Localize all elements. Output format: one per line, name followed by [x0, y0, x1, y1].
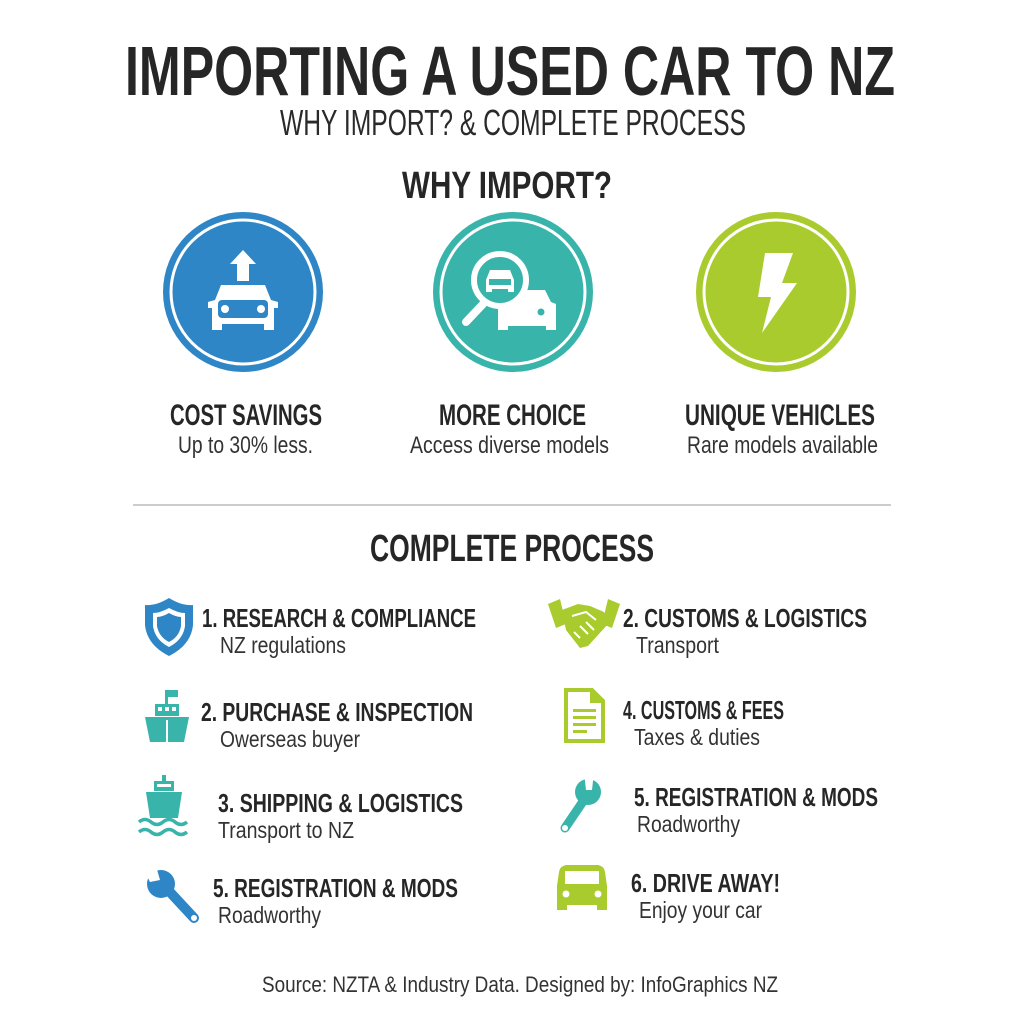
text: cost savings — [170, 399, 322, 459]
text: more choice: MORE CHOICE — [439, 399, 586, 432]
subtitle: WHY IMPORT? & COMPLETE PROCESS — [280, 102, 746, 143]
step 6 right: Enjoy your car — [639, 897, 762, 923]
step 1: NZ regulations — [220, 632, 346, 658]
step 6 right: 6. DRIVE AWAY! — [631, 868, 780, 898]
step 2 right: Transport — [636, 632, 720, 658]
step 2 left: 2. PURCHASE & INSPECTION — [201, 697, 473, 727]
icon: wrench teal — [562, 772, 601, 831]
icon: document — [566, 690, 603, 741]
icon: car lime — [557, 865, 607, 910]
step 2 left — [201, 697, 473, 752]
step 4 right: 4. CUSTOMS & FEES — [623, 695, 784, 725]
step 1 — [202, 603, 476, 658]
step 5 left: Roadworthy — [218, 902, 321, 928]
text: unique vehicles: UNIQUE VEHICLES — [685, 399, 875, 432]
icon: ship with waves — [139, 775, 187, 834]
footer source: Source: NZTA & Industry Data. Designed by: InfoGraphics NZ — [262, 972, 778, 997]
step 5 left — [213, 873, 458, 928]
step 2 right — [623, 603, 867, 658]
step 3 left — [218, 788, 463, 843]
text: more choice — [410, 399, 609, 459]
step 3 left: 3. SHIPPING & LOGISTICS — [218, 788, 463, 818]
step 2 left: Owerseas buyer — [220, 726, 360, 752]
step 1: 1. RESEARCH & COMPLIANCE — [202, 603, 476, 633]
icon: handshake — [548, 599, 620, 648]
icon: wrench blue — [142, 866, 197, 921]
text: unique vehicles — [685, 399, 878, 459]
step 3 left: Transport to NZ — [218, 817, 354, 843]
icon: ship — [145, 690, 189, 742]
heading: why import: WHY IMPORT? — [402, 165, 612, 207]
icon: shield — [145, 598, 193, 656]
icon: unique vehicles circle — [696, 212, 856, 372]
text: cost savings: COST SAVINGS — [170, 399, 322, 432]
text: cost savings: Up to 30% less. — [178, 432, 313, 459]
icon: cost savings circle — [163, 212, 323, 372]
step 6 right — [631, 868, 780, 923]
heading: complete process: COMPLETE PROCESS — [370, 528, 654, 570]
text: more choice: Access diverse models — [410, 432, 609, 459]
step 5 right: 5. REGISTRATION & MODS — [634, 782, 878, 812]
step 5 right: Roadworthy — [637, 811, 740, 837]
text: unique vehicles: Rare models available — [687, 432, 878, 459]
step 4 right: Taxes & duties — [634, 724, 760, 750]
step 5 left: 5. REGISTRATION & MODS — [213, 873, 458, 903]
icon: more choice circle — [433, 212, 593, 372]
step 2 right: 2. CUSTOMS & LOGISTICS — [623, 603, 867, 633]
step 5 right — [634, 782, 878, 837]
step 4 right — [623, 695, 784, 750]
